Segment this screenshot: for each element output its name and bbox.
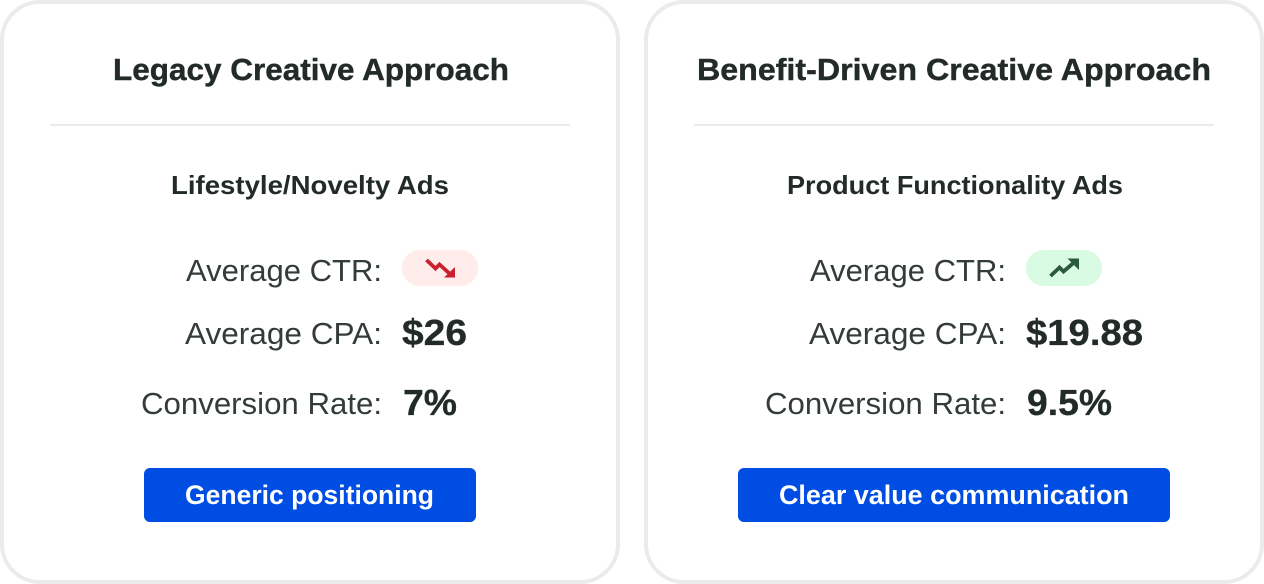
button: generic positioning: Generic positioning	[185, 480, 434, 510]
label: conversion rate: Conversion Rate:	[765, 386, 1006, 421]
icon: CTR trending down	[402, 250, 478, 286]
subheading: product functionality ads: Product Functionality Ads	[787, 170, 1123, 200]
label: average CPA: Average CPA:	[185, 316, 382, 351]
label: average CTR: Average CTR:	[810, 253, 1006, 288]
panel: benefit-driven creative approach	[646, 2, 1262, 582]
heading: benefit-driven: Benefit-Driven Creative Approach	[697, 52, 1211, 87]
button: generic positioning	[144, 468, 476, 522]
panel: legacy creative approach	[2, 2, 618, 582]
value: CPA: $19.88	[1026, 312, 1143, 353]
label: average CPA: Average CPA:	[809, 316, 1006, 351]
label: average CTR: Average CTR:	[186, 253, 382, 288]
value: conversion rate: 7%	[403, 382, 457, 423]
heading: legacy: Legacy Creative Approach	[113, 52, 509, 87]
label: conversion rate: Conversion Rate:	[141, 386, 382, 421]
subheading: lifestyle ads: Lifestyle/Novelty Ads	[171, 170, 449, 200]
value: conversion rate: 9.5%	[1027, 382, 1112, 423]
button: clear value communication: Clear value communication	[779, 480, 1129, 510]
icon: CTR trending up	[1026, 250, 1102, 286]
value: CPA: $26	[402, 312, 467, 353]
button: clear value communication	[738, 468, 1170, 522]
